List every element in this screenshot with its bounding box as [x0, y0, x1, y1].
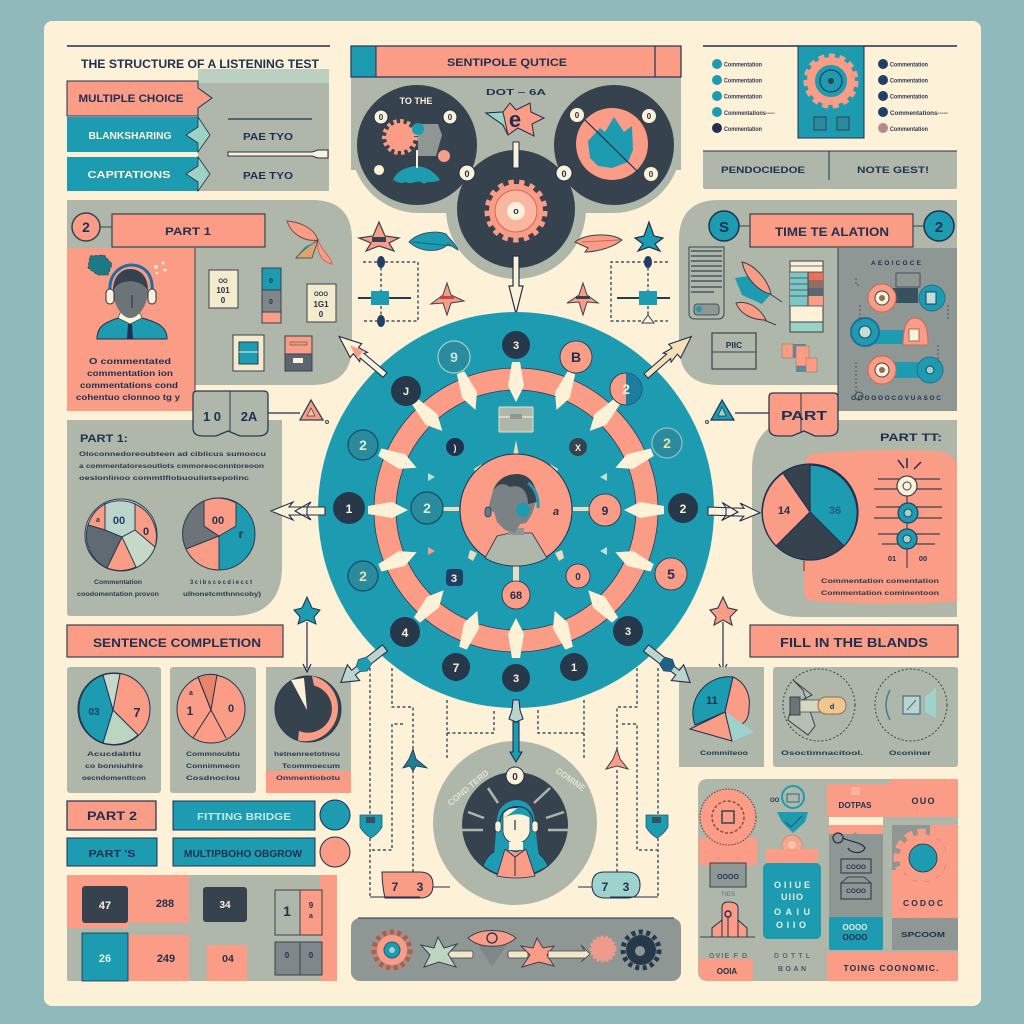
left dial: 0 — [379, 113, 384, 122]
legend right: Commentation — [890, 126, 928, 133]
captions — [77, 579, 261, 598]
numbered nodes salmon: 2 — [622, 381, 630, 397]
tab: left connector: 1 0 — [203, 409, 221, 424]
panel: fill blank dials: Oconiner — [889, 750, 932, 757]
left dial — [357, 85, 477, 205]
pie chart — [177, 674, 245, 743]
label row: part 2 — [67, 800, 350, 830]
description text: commentation ion — [87, 369, 173, 378]
bottom left labels: OVIE F D — [709, 953, 747, 960]
arrows from wheel — [271, 330, 760, 762]
icon: person with headphones — [88, 255, 167, 339]
paragraph: a commentatoresoutlots cmmoreoconntoreoon — [79, 463, 264, 470]
folder icon — [499, 407, 533, 432]
icon: leaf — [287, 221, 332, 264]
arrow: northeast — [640, 330, 697, 383]
numbered nodes salmon: 5 — [667, 566, 675, 582]
icon: teal leaf — [409, 232, 458, 250]
pie chart two: r — [239, 527, 244, 541]
pill right: 7 — [602, 880, 609, 894]
icon: triangle right — [706, 400, 769, 424]
small inner nodes: ) — [454, 443, 456, 453]
pie chart — [762, 464, 858, 571]
numbered nodes dark: 1 — [571, 662, 577, 674]
paragraph — [79, 451, 266, 482]
mini table top: 1 — [283, 903, 291, 919]
bulb timeline: 01 — [888, 554, 896, 563]
legend left: Commentation — [724, 126, 762, 133]
mini table top: 9 — [309, 901, 314, 910]
number badge — [72, 213, 112, 241]
panel: translation part — [679, 200, 957, 411]
caption: Commentation comentation — [821, 578, 939, 585]
multiple choice tab — [67, 81, 212, 116]
leaves — [735, 262, 782, 325]
arrow: west — [271, 502, 325, 520]
center gear dial: 0 — [464, 169, 470, 179]
score 04 — [207, 945, 247, 981]
teal tab two: CAPITATIONS — [88, 170, 171, 181]
tab: left connector — [193, 391, 268, 436]
fill in the blanks heading — [750, 625, 958, 657]
header bar: SENTIPOLE QUTICE — [447, 57, 567, 69]
curved label left: COND TERD — [446, 768, 491, 808]
pill left — [370, 872, 450, 898]
panel: part ii left — [67, 391, 282, 616]
small inner nodes: 3 — [451, 573, 457, 585]
icon: salmon star — [359, 222, 399, 251]
caption: Tcommoecum — [282, 763, 340, 770]
description text: commentations cond — [80, 381, 178, 390]
icon: shield right — [646, 815, 668, 838]
arrow: top down — [509, 142, 523, 314]
right dial: 0 — [649, 170, 654, 179]
document icon — [689, 247, 724, 319]
part two labels: PAE TYO — [243, 171, 293, 182]
arrow long — [548, 945, 590, 962]
middle column — [763, 786, 821, 973]
icon cards — [209, 268, 336, 371]
procedure and note box — [703, 151, 957, 189]
heading — [112, 214, 265, 247]
middle column: OIIUE — [774, 880, 810, 890]
bulb timeline — [874, 458, 942, 568]
score 26 — [82, 933, 175, 981]
numbered nodes teal: 2 — [359, 437, 367, 453]
pie chart one: 00 — [113, 515, 125, 527]
captions: Osoctimnacitool. — [781, 750, 863, 757]
captions: coodomentation provon — [77, 591, 159, 598]
legend left: Commentations----- — [724, 110, 775, 117]
score 34: 34 — [219, 900, 231, 911]
teal tab one — [67, 117, 210, 152]
legend left — [712, 59, 775, 133]
sentence completion heading: SENTENCE COMPLETION — [93, 636, 261, 650]
pill right — [578, 872, 658, 898]
left dial: TO THE — [400, 96, 432, 106]
paragraph: oeslonlinoo commtlflobuoulietsepolinc — [79, 475, 250, 482]
icon: salmon leaf — [575, 235, 622, 252]
striped table — [790, 261, 823, 332]
inner connectors — [428, 440, 607, 581]
icon: eye funnel — [468, 930, 516, 967]
dotted gear column: OOOO — [717, 874, 739, 881]
legend right: Commentation — [890, 62, 928, 68]
blocks icon — [782, 344, 817, 372]
bottom salmon banner: TOING COONOMIC. — [844, 963, 938, 973]
mini table bottom: 0 — [285, 951, 290, 960]
node — [506, 767, 524, 785]
icon cards: 101 — [216, 286, 230, 295]
caption: co bonniuhlre — [85, 763, 144, 770]
bottom left labels: OOIA — [717, 967, 737, 976]
top salmon tag: OUO — [912, 796, 934, 806]
middle column: OIIO — [776, 920, 806, 930]
card four: CODOC — [903, 898, 943, 908]
donut gauge — [275, 676, 341, 742]
badge right: 2 — [935, 219, 943, 236]
description text: O commentated — [89, 357, 171, 366]
arrow: south — [509, 700, 523, 762]
label row: part 3 — [67, 837, 350, 867]
panel: fill blank dials — [773, 667, 958, 767]
numbered nodes dark: 3 — [513, 340, 519, 352]
bottom center listener badge — [433, 741, 597, 905]
caption: Cosdnoclou — [186, 775, 240, 782]
card three: OOOO — [843, 933, 867, 942]
panel: fill blank pie — [679, 667, 764, 767]
captions: Commentation — [94, 579, 142, 586]
teal gear card — [798, 46, 864, 138]
mini table top: a — [309, 913, 313, 920]
arrow bar — [445, 951, 473, 958]
teal tab two — [67, 157, 210, 191]
icon cards: 0 — [319, 310, 324, 319]
caption: Connimmeon — [186, 763, 240, 770]
panel: central top multiple choice: DOT – 6A — [486, 88, 546, 97]
center hub with listener — [460, 454, 572, 566]
middle column: UIIO — [781, 892, 803, 902]
pie chart: 03 — [88, 707, 100, 718]
score 47: 47 — [99, 900, 111, 912]
legend right: Commentation — [890, 78, 928, 84]
icon: rocket — [700, 902, 755, 937]
icon: star salmon with line — [710, 597, 737, 672]
badge right — [913, 211, 954, 241]
icon: small star — [567, 283, 598, 315]
panel: top right legend — [703, 46, 957, 189]
dial one — [783, 669, 855, 741]
arrow bar two — [508, 951, 528, 958]
pie chart two: 00 — [212, 515, 224, 527]
icon: star teal with line — [294, 597, 320, 672]
tab: right connector part — [769, 393, 838, 436]
pie chart one: 0 — [143, 526, 149, 538]
caption: Commiteoo — [700, 750, 748, 757]
multiple choice tab: MULTIPLE CHOICE — [78, 93, 184, 105]
icon: star with letter — [486, 103, 544, 136]
card three — [829, 825, 883, 950]
cream spokes — [368, 362, 664, 658]
label row: part 3: PART 'S — [88, 848, 136, 860]
numbered nodes dark: J — [403, 386, 409, 398]
card four — [892, 825, 958, 950]
panel: part iii right — [752, 393, 957, 617]
numbered nodes dark: 1 — [346, 502, 353, 516]
bulb timeline: 00 — [919, 554, 927, 563]
middle column: BOAN — [778, 966, 806, 973]
box icon — [712, 333, 756, 369]
dotted gear column: TIES — [721, 891, 736, 898]
pie chart: 36 — [829, 505, 841, 517]
icon: star with letter: e — [509, 107, 521, 132]
heading — [750, 214, 913, 247]
pill right: 3 — [623, 880, 630, 894]
numbered nodes dark: 4 — [402, 626, 409, 640]
numbered nodes dark: 2 — [680, 502, 687, 516]
right dial: 0 — [647, 112, 652, 121]
teal tab one: BLANKSHARING — [88, 131, 172, 142]
arrow: east — [708, 502, 760, 522]
icon cards: 0 — [221, 296, 226, 305]
caption: Ommentiobotu — [276, 775, 340, 782]
left dial: 0 — [448, 113, 453, 122]
pie chart: 7 — [133, 705, 141, 720]
tab: right connector part: PART — [781, 408, 827, 423]
pie chart one: a — [96, 517, 100, 524]
legend right: Commentations----- — [890, 110, 948, 117]
flow diagram: AEOICOCE — [871, 260, 922, 267]
number badge: 2 — [82, 219, 90, 235]
legend left: Commentation — [724, 94, 762, 100]
top salmon tag: DOTPAS — [838, 801, 872, 810]
caption: Acucdabtlu — [87, 751, 141, 758]
pie chart: a — [189, 690, 193, 697]
procedure and note box: NOTE GEST! — [857, 165, 929, 176]
middle column: OAIU — [774, 907, 810, 917]
caption — [821, 578, 939, 597]
panel: score table — [67, 875, 337, 981]
captions: ulhonetcmthnncoby) — [183, 591, 261, 598]
score 04: 04 — [222, 953, 234, 965]
numbered nodes teal: 2 — [663, 435, 671, 451]
pill left: 7 — [392, 880, 399, 894]
small inner nodes — [446, 438, 587, 586]
numbered nodes salmon: 68 — [510, 590, 522, 602]
connector diagram left — [358, 256, 418, 327]
dark disc — [462, 772, 568, 878]
procedure and note box: PENDOCIEDOE — [721, 165, 805, 176]
panel: listening test structure — [67, 46, 330, 191]
description text: cohentuo clonnoo tg y — [76, 393, 181, 402]
mini table bottom: 0 — [309, 951, 314, 960]
middle column: OO — [770, 798, 780, 804]
title: THE STRUCTURE OF A LISTENING TEST — [81, 59, 319, 71]
bottom salmon banner — [827, 952, 958, 981]
icon: star right small — [606, 749, 628, 769]
dial one: d — [830, 702, 835, 711]
label row: part 2: FITTING BRIDGE — [197, 812, 291, 823]
numbered nodes dark: 7 — [453, 661, 460, 675]
connector diagram right — [611, 256, 670, 323]
bottom center listener badge: 0 — [512, 772, 518, 783]
badge left — [709, 211, 752, 241]
light rays — [460, 788, 570, 830]
numbered nodes teal: 2 — [423, 500, 431, 516]
salmon ring — [385, 379, 647, 641]
arrow: southeast — [640, 640, 696, 690]
numbered nodes salmon: 0 — [575, 572, 581, 583]
right dial — [554, 85, 674, 205]
icon cards: 0 — [269, 278, 273, 285]
numbered nodes salmon — [502, 341, 687, 609]
legend right — [878, 59, 948, 133]
icon: star left small — [403, 749, 427, 771]
numbered nodes salmon: B — [571, 349, 581, 365]
caption — [274, 751, 340, 782]
caption — [186, 751, 240, 782]
icon cards: 0 — [269, 299, 273, 306]
panel: sentence chart three — [266, 667, 351, 793]
flow diagram — [851, 260, 948, 402]
numbered nodes teal: 9 — [450, 349, 458, 365]
part two labels — [228, 119, 328, 182]
dotted gear column — [699, 789, 757, 898]
numbered nodes dark: 3 — [513, 673, 519, 685]
icon: gear salmon — [374, 932, 410, 968]
panel: central top multiple choice — [351, 46, 681, 314]
heading: TIME TE ALATION — [775, 227, 889, 239]
pie chart one — [85, 499, 157, 571]
center gear dial: 0 — [561, 169, 567, 179]
panel: sentence chart one — [67, 667, 161, 793]
icon: red star — [431, 283, 464, 315]
pie chart two — [183, 498, 255, 570]
paragraph: Oloconnedoreoubteen ad ciblicus sumoocu — [79, 451, 266, 458]
icon cards: 1G1 — [313, 300, 329, 309]
part two labels: PAE TYO — [243, 132, 293, 143]
label row: part 2: PART 2 — [87, 811, 137, 823]
score 26: 26 — [99, 953, 111, 965]
panel: bottom right dashboard — [698, 779, 958, 981]
score 47 — [82, 886, 174, 923]
curved label right: ODMINE — [554, 765, 588, 793]
pie: 11 — [706, 695, 718, 707]
bottom center process strip — [351, 918, 681, 981]
description text — [76, 357, 181, 402]
caption: oecndomenttcon — [82, 775, 146, 782]
numbered nodes teal — [348, 341, 682, 591]
label row: part 3: MULTIPBOHO OBGROW — [184, 849, 303, 860]
caption: hetnenreetotnou — [274, 751, 340, 758]
legend left: Commentation — [724, 78, 762, 84]
middle column: DOTTL — [774, 953, 811, 960]
icon: woman with headphones — [483, 800, 548, 878]
panel: top left symbols — [358, 222, 670, 327]
caption: Commnoubtu — [186, 751, 240, 758]
card four: SPCOOM — [901, 930, 945, 939]
center gear dial — [457, 150, 575, 268]
icon: pink blob — [591, 937, 615, 961]
heading: PART TT: — [880, 432, 942, 444]
score 26: 249 — [157, 953, 175, 965]
panel: part 1 — [67, 200, 352, 411]
score 34 — [203, 887, 247, 922]
top salmon tag — [827, 779, 958, 817]
header bar — [351, 46, 681, 77]
card three: COOO — [846, 864, 866, 871]
sentence completion heading — [67, 625, 283, 657]
card three: COOO — [846, 888, 866, 895]
score 47: 288 — [156, 898, 174, 910]
card three: OOOO — [843, 923, 867, 932]
box icon: PIIC — [726, 340, 742, 350]
caption — [82, 751, 146, 782]
caption: Commentation cominentoon — [821, 590, 939, 597]
pie chart: 0 — [228, 703, 234, 715]
numbered nodes salmon: 9 — [602, 504, 609, 518]
fill in the blanks heading: FILL IN THE BLANDS — [780, 635, 928, 650]
arrow: northwest — [333, 330, 391, 382]
arrow: southwest — [335, 640, 391, 690]
legend right: Commentation — [890, 94, 928, 100]
bottom connectors — [370, 668, 658, 897]
captions: 3 c i b s c o c d i e c c t — [190, 579, 253, 586]
right dial: 0 — [575, 111, 580, 120]
icon cards: OO — [218, 279, 228, 285]
small inner nodes: X — [575, 443, 581, 453]
numbered nodes dark — [333, 331, 698, 692]
icon: teal star — [635, 222, 663, 251]
icon cards: OOO — [314, 292, 328, 298]
icon: star — [421, 937, 457, 967]
pie chart: 14 — [778, 505, 791, 517]
heading: PART 1: — [80, 433, 128, 445]
panel: sentence chart two — [170, 667, 256, 793]
pill left: 3 — [417, 880, 424, 894]
icon: dark gear — [623, 932, 659, 968]
tab: left connector: 2A — [241, 409, 258, 424]
center gear dial: o — [513, 206, 519, 216]
badge left: S — [719, 219, 729, 236]
wheel disc — [318, 312, 714, 708]
mini table top — [275, 890, 322, 935]
icon: triangle left — [268, 400, 328, 424]
pie chart: 1 — [187, 704, 194, 718]
icon: shield left — [360, 815, 382, 838]
heading: PART 1 — [165, 226, 211, 238]
icon: salmon star — [521, 938, 554, 967]
mini table bottom — [275, 942, 322, 975]
bottom left labels — [699, 953, 753, 981]
flow diagram: OOOOOOCOVUASOC — [851, 395, 941, 402]
center hub with listener: a — [553, 506, 559, 518]
numbered nodes dark: 3 — [625, 626, 631, 638]
pie chart — [78, 673, 150, 745]
legend left: Commentation — [724, 62, 762, 68]
numbered nodes teal: 2 — [359, 568, 367, 584]
central wheel — [318, 312, 714, 708]
dial two — [875, 669, 947, 741]
